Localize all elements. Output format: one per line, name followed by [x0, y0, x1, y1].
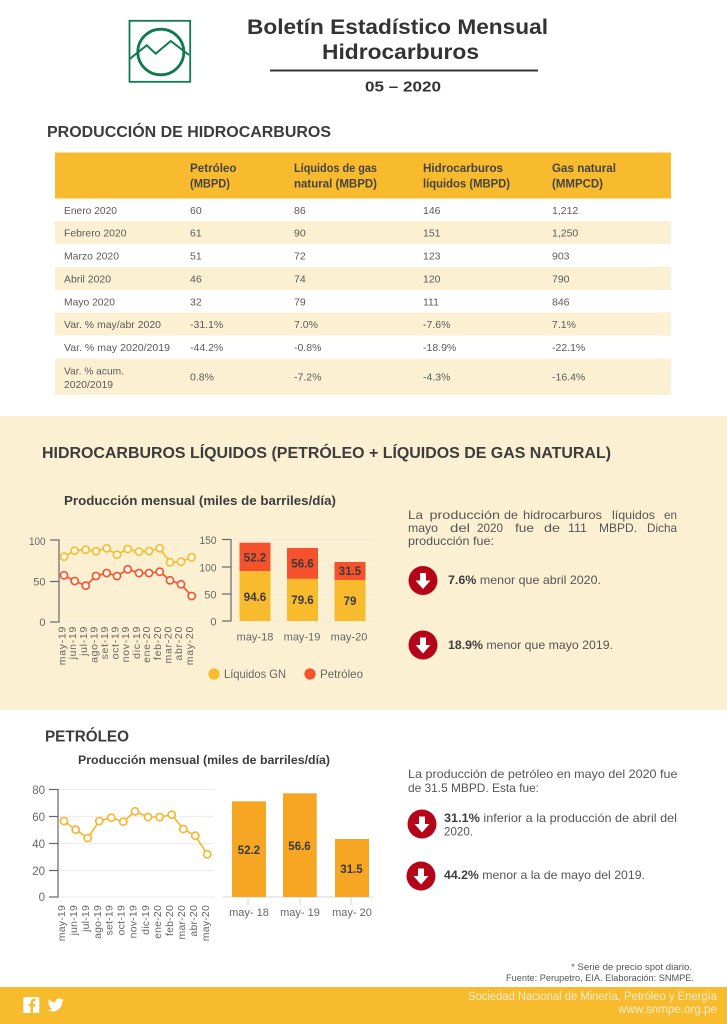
- organisation name and url: www.snmpe.org.pe: [617, 1004, 717, 1016]
- icon: twitter: [48, 998, 64, 1012]
- line chart: líquidos GN y petróleo: may-20: [184, 626, 196, 665]
- organisation name and url: [468, 991, 718, 1016]
- row: febrero: Febrero 2020: [64, 228, 127, 240]
- line chart: líquidos GN y petróleo: feb-20: [152, 626, 164, 660]
- stacked bar chart: [200, 535, 373, 644]
- row: var may 2020/2019: -22.1%: [552, 342, 585, 354]
- row: var acumulada: -16.4%: [552, 371, 585, 383]
- title: [247, 16, 548, 96]
- stacked bar chart: 79.6: [291, 595, 314, 607]
- row: enero: 146: [423, 205, 441, 217]
- icon: SNMPE logo: [130, 21, 190, 82]
- text block: hidrocarburos líquidos: La: [408, 508, 423, 522]
- row: var may/abr: -7.6%: [423, 319, 450, 331]
- line chart: líquidos GN y petróleo: dic-19: [131, 626, 143, 659]
- text block: petróleo: de 31.5 MBPD. Esta fue:: [408, 781, 539, 795]
- text block: petróleo: La producción de petróleo en mayo del 2020 fue: [408, 767, 678, 781]
- line chart: petróleo: 80: [32, 785, 45, 797]
- row: marzo: 51: [190, 250, 202, 262]
- callout: 18.9%: 18.9% menor que mayo 2019.: [448, 638, 613, 652]
- table header row: (MMPCD): [552, 178, 603, 190]
- row: var may 2020/2019: Var. % may 2020/2019: [64, 342, 170, 354]
- row: var acumulada: 0.8%: [190, 371, 214, 383]
- legend: Petróleo: [320, 667, 363, 681]
- heading: petróleo: PETRÓLEO: [45, 726, 129, 746]
- line chart: petróleo: dic-19: [140, 905, 152, 935]
- icon: down arrow: [408, 566, 438, 595]
- row: var acumulada: 2020/2019: [64, 379, 113, 391]
- line chart: líquidos GN y petróleo: may-19: [56, 626, 68, 665]
- row: mayo: Mayo 2020: [64, 296, 115, 308]
- line chart: petróleo: 60: [32, 812, 45, 824]
- row: var may 2020/2019: -18.9%: [423, 342, 456, 354]
- row: enero: 1,212: [552, 205, 578, 217]
- stacked bar chart: may-18: [237, 632, 273, 644]
- bar chart: petróleo: 52.2: [238, 845, 260, 857]
- line chart: petróleo: ene-20: [152, 905, 164, 939]
- line chart: petróleo: set-19: [104, 905, 116, 935]
- text block: hidrocarburos líquidos: líquidos: [612, 508, 655, 522]
- stacked bar chart: may-19: [284, 632, 320, 644]
- row: febrero: 151: [423, 228, 441, 240]
- table header row: Gas natural: [552, 163, 616, 175]
- line chart: petróleo: jun-19: [68, 905, 80, 936]
- line chart: líquidos GN y petróleo: 0: [39, 617, 46, 629]
- stacked bar chart: 94.6: [244, 592, 266, 604]
- stacked bar chart: 50: [204, 590, 216, 602]
- row: abril: [64, 273, 570, 285]
- stacked bar chart: 52.2: [244, 552, 266, 564]
- row: var may/abr: [64, 319, 576, 331]
- text block: hidrocarburos líquidos: de: [544, 521, 560, 535]
- row: marzo: Marzo 2020: [64, 250, 119, 262]
- line chart: petróleo: mar-20: [176, 905, 188, 939]
- bar chart: petróleo: 56.6: [288, 841, 311, 853]
- series: petróleo: [60, 566, 195, 600]
- icon: down arrow: [408, 810, 436, 838]
- footer band: [0, 987, 727, 1024]
- row: var may/abr: Var. % may/abr 2020: [64, 319, 161, 331]
- line chart: petróleo: nov-19: [128, 905, 140, 938]
- row: abril: 120: [423, 273, 441, 285]
- text block: hidrocarburos líquidos: de: [504, 508, 518, 522]
- line chart: líquidos GN y petróleo: mar-20: [162, 626, 174, 663]
- text block: hidrocarburos líquidos: en: [664, 508, 677, 522]
- callout: 31.1%: 2020.: [444, 824, 473, 838]
- row: var may 2020/2019: -0.8%: [294, 342, 321, 354]
- table header row: Líquidos de gas: [294, 163, 377, 175]
- line chart: líquidos GN y petróleo: oct-19: [110, 626, 122, 659]
- line chart: petróleo: oct-19: [116, 905, 128, 935]
- text block: hidrocarburos líquidos: fue: [515, 521, 534, 535]
- text block: hidrocarburos líquidos: MBPD.: [599, 521, 637, 535]
- line chart: petróleo: feb-20: [164, 905, 176, 936]
- line chart: petróleo: [32, 785, 214, 941]
- text block: hidrocarburos líquidos: Dicha: [647, 521, 677, 535]
- row: enero: Enero 2020: [64, 205, 117, 217]
- source note: Fuente: Perupetro, EIA. Elaboración: SNMPE.: [506, 973, 694, 984]
- row: var may/abr: 7.0%: [294, 319, 318, 331]
- row: var acumulada: -4.3%: [423, 371, 450, 383]
- title: 05 – 2020: [365, 78, 441, 96]
- stacked bar chart: may-20: [331, 632, 367, 644]
- icon: down arrow: [408, 630, 438, 660]
- bar chart: petróleo: may- 19: [280, 907, 320, 919]
- bar chart: petróleo: [223, 793, 373, 919]
- line chart: líquidos GN y petróleo: 100: [29, 536, 46, 548]
- heading: hidrocarburos líquidos: HIDROCARBUROS LÍQUIDOS (PETRÓLEO + LÍQUIDOS DE GAS NATURAL): [42, 443, 611, 462]
- table header row: Petróleo: [190, 163, 236, 175]
- callout: 31.1%: [444, 811, 677, 838]
- row: abril: Abril 2020: [64, 273, 111, 285]
- title: Boletín Estadístico Mensual: [247, 16, 548, 39]
- source note: * Serie de precio spot diario.: [571, 962, 692, 973]
- row: marzo: 72: [294, 250, 306, 262]
- line chart: petróleo: 40: [32, 839, 45, 851]
- text block: hidrocarburos líquidos: producción: [430, 508, 500, 522]
- line chart: líquidos GN y petróleo: 50: [33, 576, 46, 588]
- row: var acumulada: Var. % acum.: [64, 365, 124, 377]
- row: mayo: 846: [552, 296, 570, 308]
- line chart: líquidos GN y petróleo: ene-20: [141, 626, 153, 663]
- bar chart: petróleo: 31.5: [340, 864, 363, 876]
- row: var may/abr: 7.1%: [552, 319, 576, 331]
- row: mayo: [64, 296, 570, 308]
- text block: petróleo: [408, 767, 678, 795]
- row: marzo: 903: [552, 250, 570, 262]
- text block: hidrocarburos líquidos: mayo: [408, 521, 438, 535]
- row: febrero: [64, 228, 578, 240]
- line chart: líquidos GN y petróleo: set-19: [99, 626, 111, 659]
- stacked bar chart: 56.6: [291, 558, 314, 570]
- text block: hidrocarburos líquidos: hidrocarburos: [523, 508, 602, 522]
- text block: hidrocarburos líquidos: producción fue:: [408, 534, 494, 548]
- row: abril: 74: [294, 273, 306, 285]
- text block: hidrocarburos líquidos: 2020: [477, 521, 503, 535]
- stacked bar chart: 100: [200, 562, 216, 574]
- line chart: líquidos GN y petróleo: [29, 536, 197, 665]
- row: mayo: 32: [190, 296, 202, 308]
- text block: hidrocarburos líquidos: del: [450, 521, 470, 535]
- icon: down arrow: [406, 862, 436, 890]
- row: febrero: 90: [294, 228, 306, 240]
- row: var may/abr: -31.1%: [190, 319, 223, 331]
- row: febrero: 1,250: [552, 228, 578, 240]
- callout: 44.2%: 44.2% menor a la de mayo del 2019.: [444, 868, 645, 882]
- title: Hidrocarburos: [322, 41, 479, 64]
- callout: 7.6%: 7.6% menor que abril 2020.: [448, 573, 601, 587]
- row: var may 2020/2019: [64, 342, 585, 354]
- table header row: [55, 152, 671, 198]
- table header row: (MBPD): [190, 178, 230, 190]
- row: var acumulada: -7.2%: [294, 371, 321, 383]
- stacked bar chart: 31.5: [339, 566, 362, 578]
- legend: [208, 667, 363, 681]
- bar chart: petróleo: may- 20: [332, 907, 372, 919]
- row: abril: 46: [190, 273, 202, 285]
- legend: Líquidos GN: [224, 667, 286, 681]
- line chart: petróleo: may-19: [56, 905, 68, 941]
- panel: hidrocarburos líquidos: [0, 416, 727, 710]
- row: mayo: 111: [423, 296, 439, 308]
- line chart: líquidos GN y petróleo: jul-19: [78, 626, 90, 657]
- row: marzo: [64, 250, 570, 262]
- text block: hidrocarburos líquidos: 111: [568, 521, 587, 535]
- line chart: líquidos GN y petróleo: jun-19: [67, 626, 79, 660]
- row: mayo: 79: [294, 296, 306, 308]
- line chart: petróleo: 20: [32, 866, 45, 878]
- chart title: Producción mensual (miles de barriles/día): [78, 753, 330, 767]
- stacked bar chart: 150: [200, 535, 216, 547]
- callout: 31.1%: 31.1% inferior a la producción de abril del: [444, 811, 677, 825]
- bar chart: petróleo: may- 18: [229, 907, 269, 919]
- line chart: líquidos GN y petróleo: ago-19: [88, 626, 100, 663]
- heading: producción de hidrocarburos: PRODUCCIÓN DE HIDROCARBUROS: [47, 122, 331, 141]
- table header row: natural (MBPD): [294, 178, 377, 190]
- line chart: líquidos GN y petróleo: abr-20: [173, 626, 185, 661]
- row: enero: 86: [294, 205, 306, 217]
- row: abril: 790: [552, 273, 570, 285]
- row: enero: 60: [190, 205, 202, 217]
- row: var may 2020/2019: -44.2%: [190, 342, 223, 354]
- organisation name and url: Sociedad Nacional de Minería, Petróleo y Energía: [468, 991, 718, 1003]
- line chart: petróleo: may-20: [200, 905, 212, 941]
- row: febrero: 61: [190, 228, 202, 240]
- source note: [506, 962, 694, 984]
- chart title: Producción mensual (miles de barriles/día): [64, 493, 336, 508]
- line chart: petróleo: abr-20: [188, 905, 200, 937]
- row: var acumulada: [64, 365, 585, 391]
- line chart: petróleo: jul-19: [80, 905, 92, 933]
- table header row: líquidos (MBPD): [423, 178, 510, 190]
- table: producción: [55, 152, 671, 395]
- stacked bar chart: 0: [210, 616, 216, 628]
- row: enero: [64, 205, 578, 217]
- line chart: petróleo: ago-19: [92, 905, 104, 939]
- stacked bar chart: 79: [344, 596, 356, 608]
- series: líquidos GN: [60, 545, 195, 566]
- icon: facebook: [23, 997, 39, 1013]
- line chart: líquidos GN y petróleo: nov-19: [120, 626, 132, 662]
- table header row: Hidrocarburos: [423, 163, 503, 175]
- line chart: petróleo: 0: [39, 892, 45, 904]
- text block: hidrocarburos líquidos: [408, 508, 677, 548]
- row: marzo: 123: [423, 250, 441, 262]
